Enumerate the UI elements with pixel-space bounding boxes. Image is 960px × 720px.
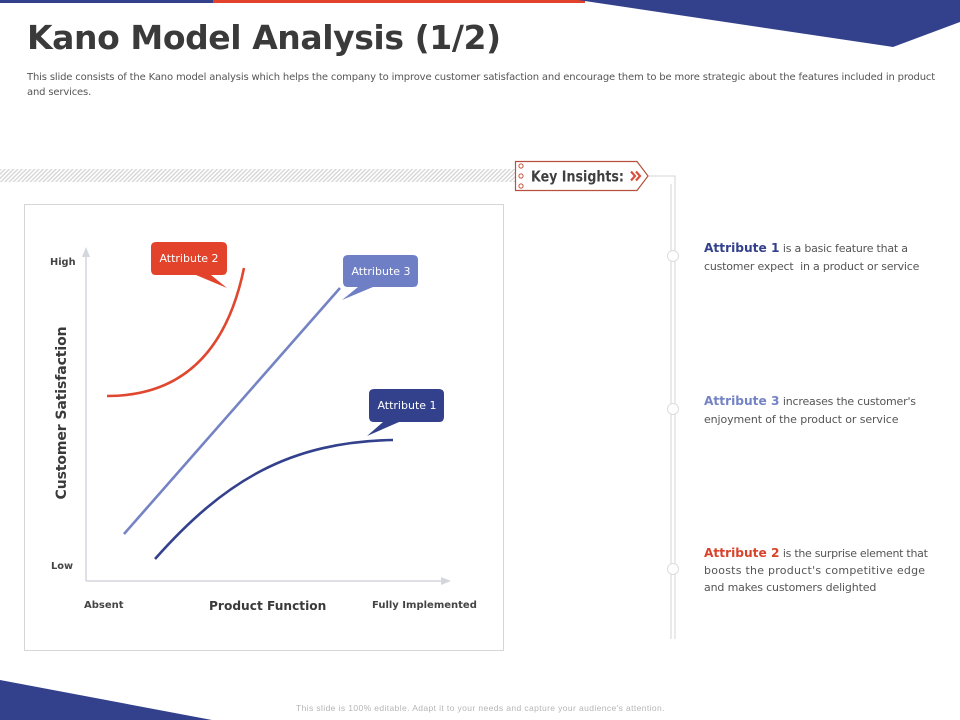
insight: attribute 2: and makes customers delighted (704, 581, 876, 594)
label: fully implemented: Fully Implemented (372, 600, 477, 611)
label: absent: Absent (84, 600, 124, 611)
description (26, 72, 935, 98)
curve: attribute 2 (107, 268, 244, 396)
insight: attribute 2: boosts the product's competitive edge (704, 564, 925, 577)
callout: attribute 3: Attribute 3 (351, 265, 411, 278)
description: This slide consists of the Kano model analysis which helps the company to improve customer satisfaction and encourage them to be more strategic about the features included in product (27, 72, 935, 83)
callout: attribute 3 (342, 255, 418, 300)
callout: attribute 1: Attribute 1 (377, 399, 437, 412)
label: high: High (50, 257, 76, 268)
insight: attribute 2: Attribute 2 is the surprise element that (704, 546, 928, 560)
description: and services. (27, 86, 91, 98)
key insights tag (514, 160, 649, 192)
callout: attribute 2 (151, 242, 227, 288)
y axis title: Customer Satisfaction (54, 327, 70, 499)
axes (82, 247, 451, 585)
callout: attribute 1 (367, 389, 444, 436)
footer note: This slide is 100% editable. Adapt it to your needs and capture your audience's attention. (296, 703, 665, 713)
key insights tag: Key Insights: (531, 168, 624, 186)
top banner (0, 0, 960, 47)
bottom left wedge (0, 680, 212, 720)
insight: attribute 3: Attribute 3 increases the customer's (704, 394, 916, 408)
label: low: Low (51, 561, 73, 572)
hatched band (0, 169, 515, 182)
curve: attribute 1 (155, 440, 393, 559)
insight: attribute 1 (704, 241, 919, 272)
chart panel (24, 204, 504, 651)
x axis title: Product Function (209, 599, 326, 613)
insight: attribute 3: enjoyment of the product or service (704, 412, 898, 426)
title: Kano Model Analysis (1/2) (27, 18, 501, 57)
insight: attribute 1: customer expect in a product or service (704, 260, 919, 272)
callout: attribute 2: Attribute 2 (159, 252, 219, 265)
line: attribute 3 (124, 288, 340, 534)
insight: attribute 1: Attribute 1 is a basic feature that a (704, 241, 908, 255)
insight: attribute 2 (704, 546, 928, 594)
insight: attribute 3 (704, 394, 916, 426)
